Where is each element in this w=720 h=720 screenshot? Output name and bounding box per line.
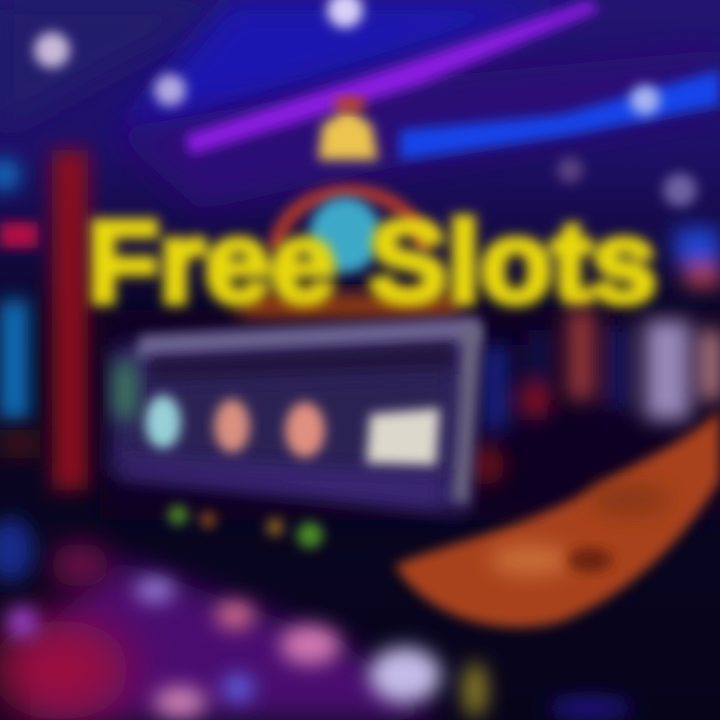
left green light xyxy=(114,362,136,418)
casino floor reflections xyxy=(0,518,632,720)
reel 2 xyxy=(214,399,250,453)
ceiling: neon streaks xyxy=(185,0,720,160)
machine side frame xyxy=(452,325,482,505)
orange hand shape xyxy=(395,410,720,627)
machine top frame xyxy=(135,318,480,358)
reel 4 xyxy=(366,408,440,466)
machine body xyxy=(110,322,478,515)
lower panel xyxy=(115,462,440,505)
reel 1 xyxy=(145,395,181,449)
top display strip xyxy=(150,342,455,385)
left red pillar and blue sign xyxy=(0,150,88,490)
reel window xyxy=(125,375,450,470)
colored buttons xyxy=(168,505,323,548)
ceiling lights xyxy=(34,0,697,207)
title: Free Slots: Free Slots xyxy=(87,197,657,327)
sign arch with star xyxy=(240,96,460,317)
right side: distant machines xyxy=(465,228,720,485)
reel 3 xyxy=(285,402,325,458)
slot machine xyxy=(110,318,482,548)
